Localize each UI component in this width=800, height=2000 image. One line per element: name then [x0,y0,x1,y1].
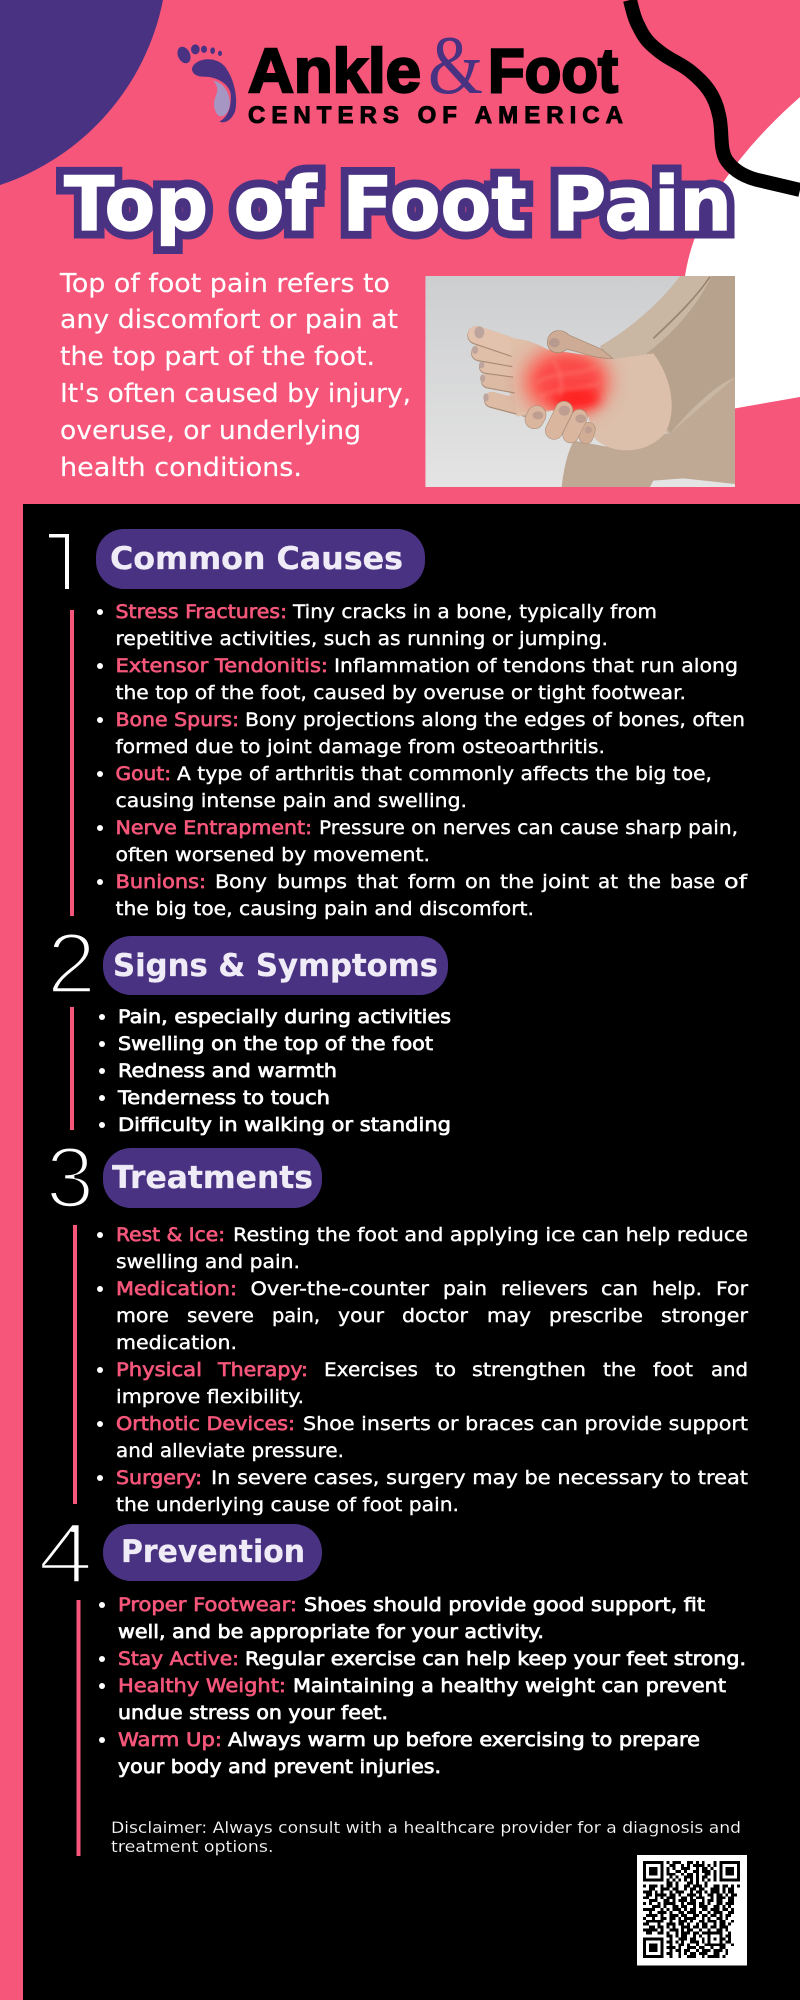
bullet list: treatments: Surgery: [116,1467,202,1489]
heading pill: Treatments [103,1148,322,1208]
bullet list: causes: at [598,871,618,893]
logo: Ankle & Foot Centers of America [175,19,623,129]
bullet list: treatments: Rest & Ice: [116,1224,225,1246]
bullet list: causes: Pressure on nerves can cause sharp pain, [319,817,738,839]
decorative black squiggle [630,0,800,190]
bullet list: causes: that [357,871,398,893]
number 3: 3 [46,1130,94,1226]
bullet list: treatments: doctor [402,1305,468,1327]
bullet list: causes: causing intense pain and swelling. [116,790,467,812]
vertical accent line [70,1007,74,1130]
bullet list: prevention: Always warm up before exercising to prepare [228,1729,700,1751]
red glow [523,347,610,417]
bullet list: causes: base [670,871,715,893]
logo tagline: CENTERS OF AMERICA [248,102,623,129]
bullet list: treatments: and [711,1359,748,1381]
bullet list: treatments: to [435,1359,456,1381]
bullet list: causes: Bony [215,871,267,893]
section 3: Treatments [46,1130,748,1516]
bullet list: treatments: help. [652,1278,702,1300]
bullet list: prevention: Regular exercise can help keep your feet strong. [245,1648,746,1670]
bullet list: treatments: may [487,1305,531,1327]
bullet list: treatments: foot [653,1359,693,1381]
bullet list: causes: often worsened by movement. [116,844,430,866]
bullet list: treatments: your [338,1305,384,1327]
bullet list: treatments: Medication: [116,1278,237,1300]
bullet list: causes: the [500,871,534,893]
bullet list: causes: Gout: [116,763,171,785]
bullet list: causes: Bone Spurs: [116,709,239,731]
thumb [547,331,613,358]
bullet list: causes: Tiny cracks in a bone, typically from [292,601,657,623]
bullet list: treatments: In severe cases, surgery may be necessary to treat [211,1467,748,1489]
disclaimer text: treatment options. [111,1837,274,1856]
vertical accent line [70,610,74,916]
heading pill: Common Causes [96,529,425,589]
vertical accent line [73,1225,77,1504]
bullet list: treatments: Exercises [324,1359,418,1381]
heading pill: Common Causes: Common Causes [110,541,403,577]
bullet list: treatments: pain [443,1278,487,1300]
vertical accent line [76,1600,80,1856]
intro paragraph: any discomfort or pain at [60,305,398,335]
bullet list: causes: bumps [277,871,347,893]
bullet list: treatments: For [716,1278,748,1300]
bullet list: treatments: improve flexibility. [116,1386,304,1408]
section 2: Signs & Symptoms [47,916,451,1136]
bullet list: causes: Bony projections along the edges of bones, often [245,709,745,731]
bullet list: treatments: Resting the foot and applying ice can help reduce [233,1224,748,1246]
bullet list: treatments: the underlying cause of foot pain. [116,1494,459,1516]
heading pill: Signs & Symptoms: Signs & Symptoms [113,948,438,984]
intro paragraph: health conditions. [60,453,302,483]
bullet list: causes: form [408,871,456,893]
logo ampersand: & [428,19,483,112]
disclaimer text: Disclaimer: Always consult with a healthcare provider for a diagnosis and [111,1818,741,1837]
title: Top of Foot Pain [64,160,732,248]
bullet list: causes [97,601,749,920]
bullet list: causes: formed due to joint damage from osteoarthritis. [116,736,605,758]
decorative purple quarter circle [0,0,163,185]
bullet list: treatments: severe [187,1305,254,1327]
intro paragraph: overuse, or underlying [60,416,361,446]
bullet list: treatments: more [116,1305,169,1327]
intro paragraph: the top part of the foot. [60,342,375,372]
bullet list: treatments: Over-the-counter [250,1278,429,1300]
bullet list: causes: on [465,871,491,893]
bullet list: prevention: Shoes should provide good support, fit [304,1594,705,1616]
bullet list: prevention: Proper Footwear: [118,1594,297,1616]
bullet list: symptoms: Difficulty in walking or standing [118,1114,451,1136]
bullet list: causes: repetitive activities, such as running or jumping. [116,628,608,650]
number 4: 4 [38,1506,93,1602]
bullet list: treatments: swelling and pain. [116,1251,300,1273]
logo word Foot: Foot [488,37,618,106]
toenails [472,326,489,401]
bullet list: symptoms: Tenderness to touch [117,1087,330,1109]
bullet list: symptoms: Redness and warmth [118,1060,337,1082]
bullet list: treatments: stronger [661,1305,748,1327]
number 2: 2 [47,916,96,1012]
bullet list: causes: A type of arthritis that commonly affects the big toe, [177,763,712,785]
bullet list: causes: of [724,871,749,893]
QR code [637,1855,747,1966]
disclaimer text [111,1818,741,1856]
decorative white blob [680,97,800,418]
bullet list: causes: Bunions: [116,871,206,893]
bullet list: treatments: medication. [116,1332,237,1354]
bullet list: treatments: and alleviate pressure. [116,1440,344,1462]
photo: foot with red pain area [425,276,735,487]
bullet list: causes: the [628,871,661,893]
toes [477,335,530,410]
bullet list: symptoms: Swelling on the top of the foot [118,1033,433,1055]
bullet list: prevention: Healthy Weight: [118,1675,286,1697]
bullet list: treatments: Physical [116,1359,202,1381]
bullet list: symptoms [99,1006,451,1136]
number 1: 1 [40,514,78,610]
intro paragraph: Top of foot pain refers to [59,269,390,299]
bullet list: prevention: your body and prevent injuries. [118,1756,441,1778]
intro paragraph [59,269,411,483]
section 1: Common Causes [30,514,749,920]
logo word Ankle: Ankle [248,37,421,106]
bullet list: treatments: relievers [501,1278,588,1300]
bullet list: treatments: prescribe [549,1305,643,1327]
black content panel [23,504,800,2000]
bullet list: prevention: well, and be appropriate for your activity. [118,1621,544,1643]
bullet list: prevention [99,1594,746,1778]
fingers [534,410,588,437]
bullet list: prevention: Maintaining a healthy weight can prevent [293,1675,726,1697]
bullet list: treatments: Therapy: [217,1359,308,1381]
bullet list: treatments: Orthotic Devices: [116,1413,295,1435]
bullet list: treatments: strengthen [472,1359,586,1381]
heading pill: Signs & Symptoms [103,936,448,995]
bullet list: causes: Stress Fractures: [116,601,287,623]
bullet list: causes: Extensor Tendonitis: [116,655,328,677]
bullet list: treatments [97,1224,748,1516]
bullet list: symptoms: Pain, especially during activities [118,1006,451,1028]
bullet list: treatments: the [603,1359,636,1381]
intro paragraph: It's often caused by injury, [60,379,411,409]
heading pill: Prevention: Prevention [121,1534,305,1570]
bullet list: treatments: pain, [272,1305,320,1327]
heading pill: Treatments: Treatments [112,1160,313,1196]
bullet list: prevention: Stay Active: [118,1648,239,1670]
bullet list: causes: the big toe, causing pain and discomfort. [116,898,534,920]
heading pill: Prevention [103,1524,322,1581]
bullet list: treatments: Shoe inserts or braces can provide support [303,1413,748,1435]
bullet list: causes: the top of the foot, caused by overuse or tight footwear. [116,682,686,704]
bullet list: causes: joint [541,871,589,893]
icon: foot logo [175,44,236,122]
bullet list: prevention: undue stress on your feet. [118,1702,388,1724]
bullet list: prevention: Warm Up: [118,1729,222,1751]
bullet list: causes: Nerve Entrapment: [116,817,312,839]
bullet list: causes: Inflammation of tendons that run along [334,655,738,677]
section 4: Prevention [38,1506,746,1856]
title: Top of Foot Pain [64,160,732,248]
bullet list: treatments: can [601,1278,638,1300]
